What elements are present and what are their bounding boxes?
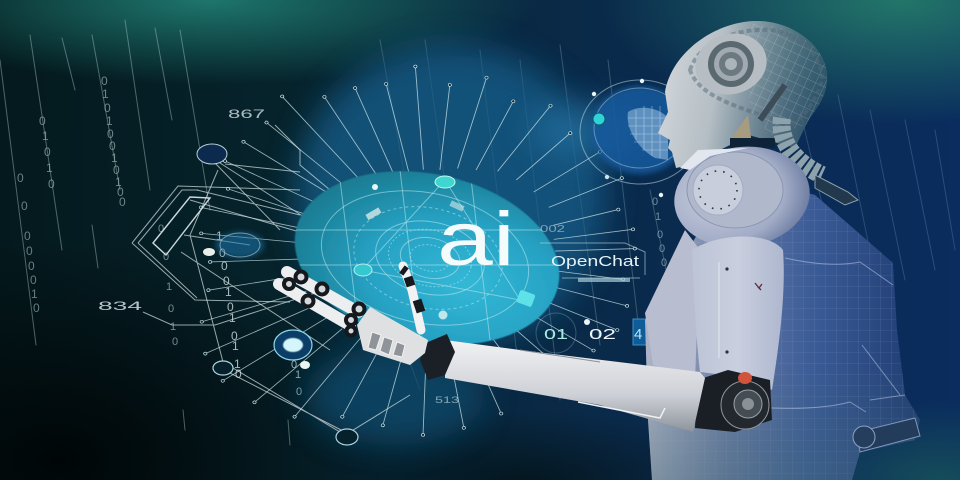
robot fingers bbox=[279, 266, 421, 330]
face scan hologram bbox=[580, 79, 700, 197]
number badges 01 02 04: 4 bbox=[634, 326, 642, 343]
small numeric labels: 867 bbox=[228, 107, 266, 121]
robot neck spine bbox=[782, 118, 858, 205]
number badges 01 02 04: 02 bbox=[589, 326, 616, 343]
robot elbow joint bbox=[695, 370, 772, 432]
hologram nodes and glows bbox=[197, 144, 358, 445]
robot upper arm panel bbox=[692, 236, 784, 390]
small numeric labels: 834 bbox=[98, 299, 143, 313]
robot shoulder joint bbox=[668, 138, 816, 256]
small numeric labels: 002 bbox=[540, 224, 566, 235]
robot palm bbox=[357, 307, 428, 365]
binary digit columns: 010 bbox=[291, 359, 302, 398]
binary digit columns: 01010010100 bbox=[101, 74, 126, 209]
OpenChat label: OpenChat bbox=[551, 253, 640, 270]
binary digit columns: 01010 bbox=[39, 114, 55, 191]
robot head bbox=[658, 21, 827, 168]
binary digit columns: 10001010110 bbox=[216, 229, 242, 381]
radial network lines with end nodes bbox=[201, 66, 635, 435]
robot forearm bbox=[445, 340, 705, 432]
small numeric labels: 513 bbox=[435, 395, 459, 405]
ai logo text: ai bbox=[437, 197, 515, 282]
OpenChat label bbox=[540, 243, 645, 282]
blue glow behind hologram bbox=[295, 45, 650, 445]
binary digit columns bbox=[17, 74, 667, 398]
binary digit columns: 001010 bbox=[158, 223, 178, 348]
number badges 01 02 04: 01 bbox=[544, 326, 568, 343]
number badges 01 02 04 bbox=[536, 313, 648, 353]
robot palm grille bbox=[368, 332, 405, 357]
binary digit columns: 01000 bbox=[652, 196, 667, 269]
left hexagonal HUD frame and connectors bbox=[132, 125, 410, 435]
robot chest side bbox=[645, 230, 700, 380]
small numeric labels bbox=[98, 107, 566, 405]
robot torso wireframe bbox=[645, 185, 920, 480]
robot wrist bbox=[420, 334, 455, 380]
robot figure bbox=[279, 21, 920, 480]
robot finger joints bbox=[284, 272, 364, 336]
binary digit columns: 00000010 bbox=[17, 171, 40, 315]
hologram disc bbox=[294, 170, 560, 344]
robot hand bbox=[279, 266, 455, 380]
